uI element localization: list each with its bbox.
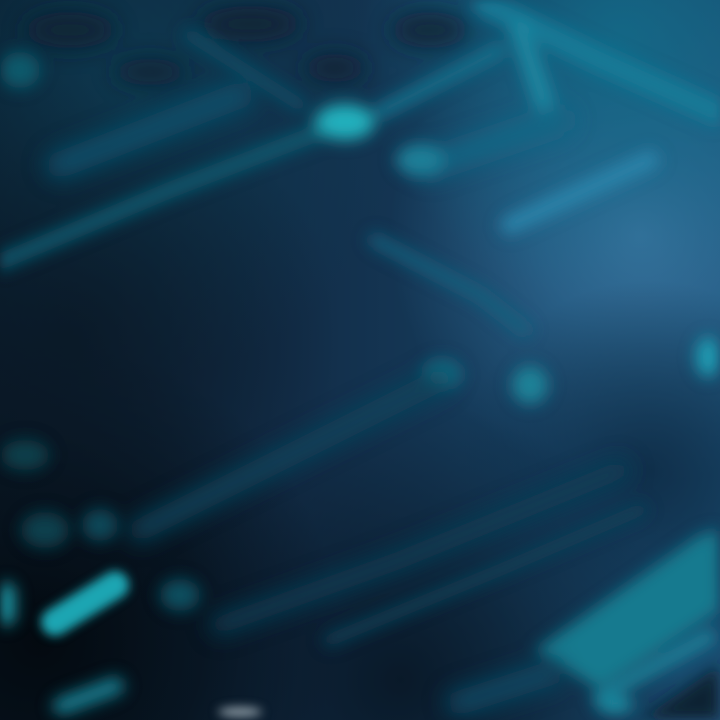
glowing nodes — [0, 52, 720, 611]
pale spot at bottom edge — [218, 707, 262, 717]
bright bottom-right panel — [450, 530, 720, 720]
bright bottom-left shapes — [6, 585, 115, 706]
dark top speckles — [25, 6, 468, 85]
middle and lower diagonal traces — [140, 380, 640, 640]
upper circuit traces — [0, 4, 716, 330]
